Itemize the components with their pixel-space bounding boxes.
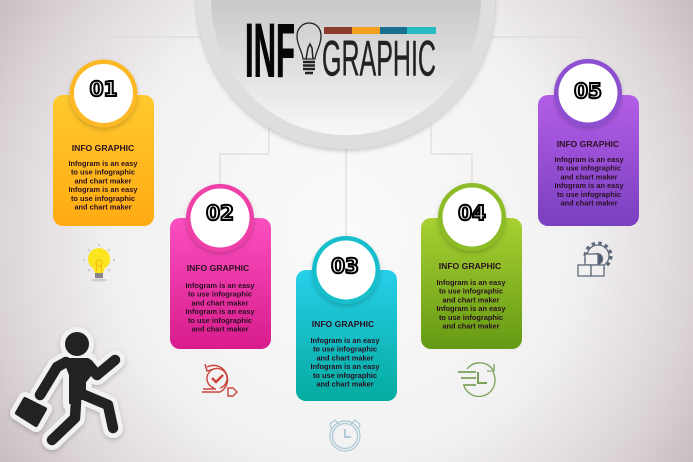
logo word GRAPHIC: GRAPHIC: [322, 30, 436, 86]
icon: alarm clock: [330, 420, 360, 451]
central hub circle: [197, 0, 495, 149]
text 04: to use infographic: [439, 313, 503, 322]
card 03: [296, 270, 397, 401]
number 01: 01: [90, 77, 117, 101]
card 04: [421, 218, 522, 349]
icon: task cycle: [202, 364, 237, 396]
panel: step 01: [53, 60, 154, 226]
text 05: and chart maker: [560, 172, 618, 181]
badge 03: [312, 236, 380, 304]
text 02: Infogram is an easy: [185, 307, 255, 316]
text 02: to use infographic: [188, 290, 252, 299]
panel: step 02: [170, 184, 271, 349]
text 05: and chart maker: [560, 198, 618, 208]
number 03: 03: [331, 254, 359, 278]
text 04: and chart maker: [442, 322, 500, 330]
runner figure: [17, 332, 115, 440]
text 03: Infogram is an easy: [310, 362, 380, 371]
text 04: to use infographic: [439, 287, 503, 296]
text 01: and chart maker: [74, 176, 132, 185]
text 02: and chart maker: [191, 298, 249, 307]
text 03: and chart maker: [316, 353, 374, 362]
text 05: Infogram is an easy: [554, 155, 624, 164]
heading 04: INFO GRAPHIC: [439, 261, 501, 271]
badge 02: [186, 184, 254, 252]
icon: fast clock: [458, 363, 495, 396]
text 05: Infogram is an easy: [554, 181, 624, 190]
panel: step 04: [421, 183, 522, 349]
badge 01: [70, 60, 138, 128]
text 03: Infogram is an easy: [310, 336, 380, 345]
runner outline: [17, 327, 115, 440]
text 01: Infogram is an easy: [68, 159, 138, 168]
card 05: [538, 95, 639, 226]
text 05: to use infographic: [557, 190, 621, 199]
heading 03: INFO GRAPHIC: [312, 319, 374, 329]
badge 05: [554, 59, 622, 127]
badge 04: [438, 183, 506, 251]
text 01: to use infographic: [71, 168, 135, 177]
number 04: 04: [458, 201, 486, 225]
logo bulb: [297, 23, 321, 73]
icon: gear and boxes: [578, 243, 611, 276]
heading 02: INFO GRAPHIC: [187, 263, 249, 273]
text 04: and chart maker: [442, 295, 500, 304]
text 01: and chart maker: [74, 202, 132, 212]
connector lines: [103, 37, 592, 236]
text 04: Infogram is an easy: [436, 278, 506, 287]
text 03: to use infographic: [313, 345, 377, 354]
card 02: [170, 218, 271, 349]
heading 05: INFO GRAPHIC: [557, 139, 619, 149]
text 01: Infogram is an easy: [68, 185, 138, 194]
text 02: to use infographic: [188, 316, 252, 325]
text 02: Infogram is an easy: [185, 281, 255, 290]
text 03: to use infographic: [313, 371, 377, 380]
text 05: to use infographic: [557, 164, 621, 173]
number 02: 02: [206, 201, 234, 225]
panel: step 05: [538, 59, 639, 226]
panel: step 03: [296, 236, 397, 401]
logo: INF: [245, 8, 295, 94]
card 01: [53, 95, 154, 226]
heading 01: INFO GRAPHIC: [72, 143, 134, 153]
icon: running businessman: [17, 327, 115, 440]
icon: light bulb: [83, 244, 115, 282]
text 03: and chart maker: [316, 380, 374, 388]
text 04: Infogram is an easy: [436, 304, 506, 313]
logo: [245, 8, 436, 94]
text 02: and chart maker: [191, 324, 249, 334]
logo colour bar: [324, 27, 436, 34]
text 01: to use infographic: [71, 194, 135, 203]
number 05: 05: [574, 79, 602, 103]
